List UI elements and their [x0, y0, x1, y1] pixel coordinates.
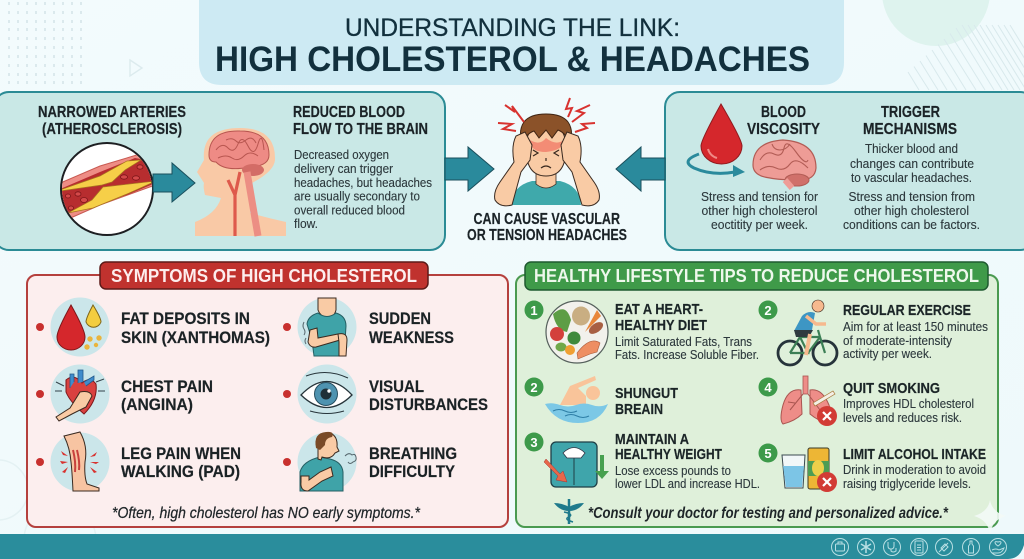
- title line 2: HIGH CHOLESTEROL & HEADACHES: [215, 40, 810, 79]
- symptom: visual disturbances: [283, 364, 488, 424]
- heading: trigger mechanisms: [863, 104, 957, 138]
- symptom: breathing difficulty: [283, 432, 457, 492]
- symptom: leg pain: WALKING (PAD): [121, 462, 240, 481]
- tip 2: swimming: BREAIN: [615, 401, 663, 418]
- icon: blood drop with swirl: [688, 104, 745, 177]
- tip 1: heart-healthy diet: Fats. Increase Soluble Fiber.: [615, 348, 759, 362]
- text: blood viscosity description: Stress and tension for: [701, 190, 818, 204]
- icon: brain: [753, 140, 816, 188]
- tip 4: regular exercise: Aim for at least 150 minutes: [843, 320, 988, 334]
- symptom: breathing difficulty: BREATHING: [369, 444, 457, 463]
- symptom: fat deposits: [36, 298, 270, 356]
- text: trigger mechanisms description: to vascular headaches.: [851, 171, 972, 185]
- icon: first aid kit: [832, 538, 848, 556]
- symptom: chest pain: (ANGINA): [121, 395, 193, 414]
- symptom: sudden weakness: [283, 298, 454, 356]
- text: reduced blood flow description: headaches, but headaches: [294, 176, 432, 190]
- tip 2: swimming: [524, 376, 678, 423]
- tip 4: regular exercise: REGULAR EXERCISE: [843, 302, 971, 319]
- tip 2: swimming: 2: [530, 380, 538, 395]
- tip 5: quit smoking: QUIT SMOKING: [843, 380, 940, 397]
- text: reduced blood flow description: overall reduced blood: [294, 204, 405, 218]
- tip 4: regular exercise: 2: [764, 303, 772, 318]
- heading: blood viscosity: VISCOSITY: [747, 121, 820, 138]
- tip 6: limit alcohol: [758, 444, 986, 492]
- tip 5: quit smoking: levels and reduces risk.: [843, 411, 962, 425]
- heading: trigger mechanisms: TRIGGER: [881, 104, 940, 121]
- symptom: sudden weakness: SUDDEN: [369, 309, 431, 328]
- panel: reduced blood flow: [0, 92, 445, 250]
- panel: blood viscosity and triggers: [665, 92, 1024, 250]
- symptom: leg pain: [36, 432, 241, 492]
- symptom: fat deposits: SKIN (XANTHOMAS): [121, 328, 270, 347]
- heading: reduced blood flow: FLOW TO THE BRAIN: [293, 121, 428, 138]
- icon: narrowed artery: [58, 143, 158, 235]
- heading: lifestyle tips banner: [525, 262, 988, 290]
- icon: medical star: [858, 538, 874, 556]
- tip 1: heart-healthy diet: EAT A HEART-: [615, 301, 703, 318]
- tip 1: heart-healthy diet: Limit Saturated Fats, Trans: [615, 335, 752, 349]
- heading: narrowed arteries: (ATHEROSCLEROSIS): [42, 121, 182, 138]
- tip 3: healthy weight: [524, 431, 760, 491]
- panel: healthy lifestyle tips: [516, 262, 998, 527]
- heading: symptoms banner: SYMPTOMS OF HIGH CHOLESTEROL: [111, 266, 417, 286]
- icon: stethoscope: [884, 538, 900, 556]
- heading: lifestyle tips banner: HEALTHY LIFESTYLE TIPS TO REDUCE CHOLESTEROL: [534, 266, 979, 286]
- text: trigger mechanisms description: other high cholesterol: [854, 204, 969, 218]
- heading: narrowed arteries: NARROWED ARTERIES: [38, 104, 186, 121]
- symptom: breathing difficulty: DIFFICULTY: [369, 462, 456, 481]
- text: trigger mechanisms description: Stress and tension from: [848, 190, 975, 204]
- tip 1: heart-healthy diet: HEALTHY DIET: [615, 317, 707, 334]
- tip 6: limit alcohol: 5: [764, 446, 772, 461]
- icon: head with brain: [195, 128, 286, 236]
- icon: hand with heart: [990, 538, 1006, 556]
- heading: reduced blood flow: [293, 104, 428, 138]
- tip 1: heart-healthy diet: [524, 300, 759, 363]
- text: reduced blood flow description: flow.: [294, 217, 318, 231]
- text: trigger mechanisms description: changes can contribute: [850, 157, 974, 171]
- text: reduced blood flow description: Decreased oxygen: [294, 148, 389, 162]
- tip 3: healthy weight: 3: [530, 435, 538, 450]
- symptom: visual disturbances: VISUAL: [369, 377, 424, 396]
- tip 5: quit smoking: [758, 376, 974, 426]
- tip 1: heart-healthy diet: 1: [530, 303, 538, 318]
- tip 4: regular exercise: [758, 300, 988, 365]
- tip 2: swimming: SHUNGUT: [615, 385, 678, 402]
- tip 6: limit alcohol: raising triglyceride levels.: [843, 477, 971, 491]
- symptom: visual disturbances: DISTURBANCES: [369, 395, 488, 414]
- icon: person with headache: [495, 98, 599, 206]
- tip 4: regular exercise: activity per week.: [843, 347, 932, 361]
- text: blood viscosity description: [701, 190, 818, 232]
- title line 1: UNDERSTANDING THE LINK:: [345, 14, 680, 42]
- tip 6: limit alcohol: Drink in moderation to avoid: [843, 463, 986, 477]
- heading: narrowed arteries: [38, 104, 186, 138]
- symptom: chest pain: CHEST PAIN: [121, 377, 213, 396]
- caption: headache types: CAN CAUSE VASCULAR: [474, 211, 620, 228]
- text: trigger mechanisms description: [843, 142, 980, 232]
- heading: blood viscosity: [747, 104, 820, 138]
- title banner: [199, 0, 844, 85]
- icon: syringe: [936, 538, 952, 556]
- heading: trigger mechanisms: MECHANISMS: [863, 121, 957, 138]
- arrow: left panel to headache: [445, 147, 494, 191]
- text: reduced blood flow description: delivery can trigger: [294, 162, 393, 176]
- tip 3: healthy weight: MAINTAIN A: [615, 431, 689, 448]
- note: no early symptoms: *Often, high cholesterol has NO early symptoms.*: [112, 505, 421, 522]
- icon: clipboard: [910, 538, 928, 556]
- tip 3: healthy weight: Lose excess pounds to: [615, 464, 731, 478]
- text: reduced blood flow description: [294, 148, 432, 231]
- tip 4: regular exercise: of moderate-intensity: [843, 334, 953, 348]
- panel: symptoms of high cholesterol: [27, 262, 508, 527]
- symptom: leg pain: LEG PAIN WHEN: [121, 444, 241, 463]
- footer bar with icons: [0, 534, 1024, 559]
- text: blood viscosity description: eoctitity per week.: [711, 218, 808, 232]
- caption: headache types: [467, 211, 627, 244]
- symptom: chest pain: [36, 364, 213, 424]
- tip 3: healthy weight: HEALTHY WEIGHT: [615, 446, 722, 463]
- arrow: artery to brain: [153, 163, 195, 202]
- text: trigger mechanisms description: conditions can be factors.: [843, 218, 980, 232]
- tip 5: quit smoking: Improves HDL cholesterol: [843, 397, 974, 411]
- icon: caduceus: [554, 499, 584, 524]
- caption: headache types: OR TENSION HEADACHES: [467, 227, 627, 244]
- symptom: sudden weakness: WEAKNESS: [369, 328, 454, 347]
- arrow: right panel to headache: [616, 147, 665, 191]
- tip 6: limit alcohol: LIMIT ALCOHOL INTAKE: [843, 446, 986, 463]
- symptom: fat deposits: FAT DEPOSITS IN: [121, 309, 250, 328]
- note: consult your doctor: *Consult your doctor for testing and personalized advice.*: [588, 505, 949, 522]
- tip 3: healthy weight: lower LDL and increase HDL.: [615, 477, 760, 491]
- tip 5: quit smoking: 4: [764, 380, 772, 395]
- heading: blood viscosity: BLOOD: [761, 104, 806, 121]
- heading: reduced blood flow: REDUCED BLOOD: [293, 104, 405, 121]
- text: reduced blood flow description: are usually secondary to: [294, 190, 420, 204]
- text: blood viscosity description: other high cholesterol: [702, 204, 818, 218]
- icon: medicine bottle: [962, 538, 980, 556]
- text: trigger mechanisms description: Thicker blood and: [865, 142, 958, 156]
